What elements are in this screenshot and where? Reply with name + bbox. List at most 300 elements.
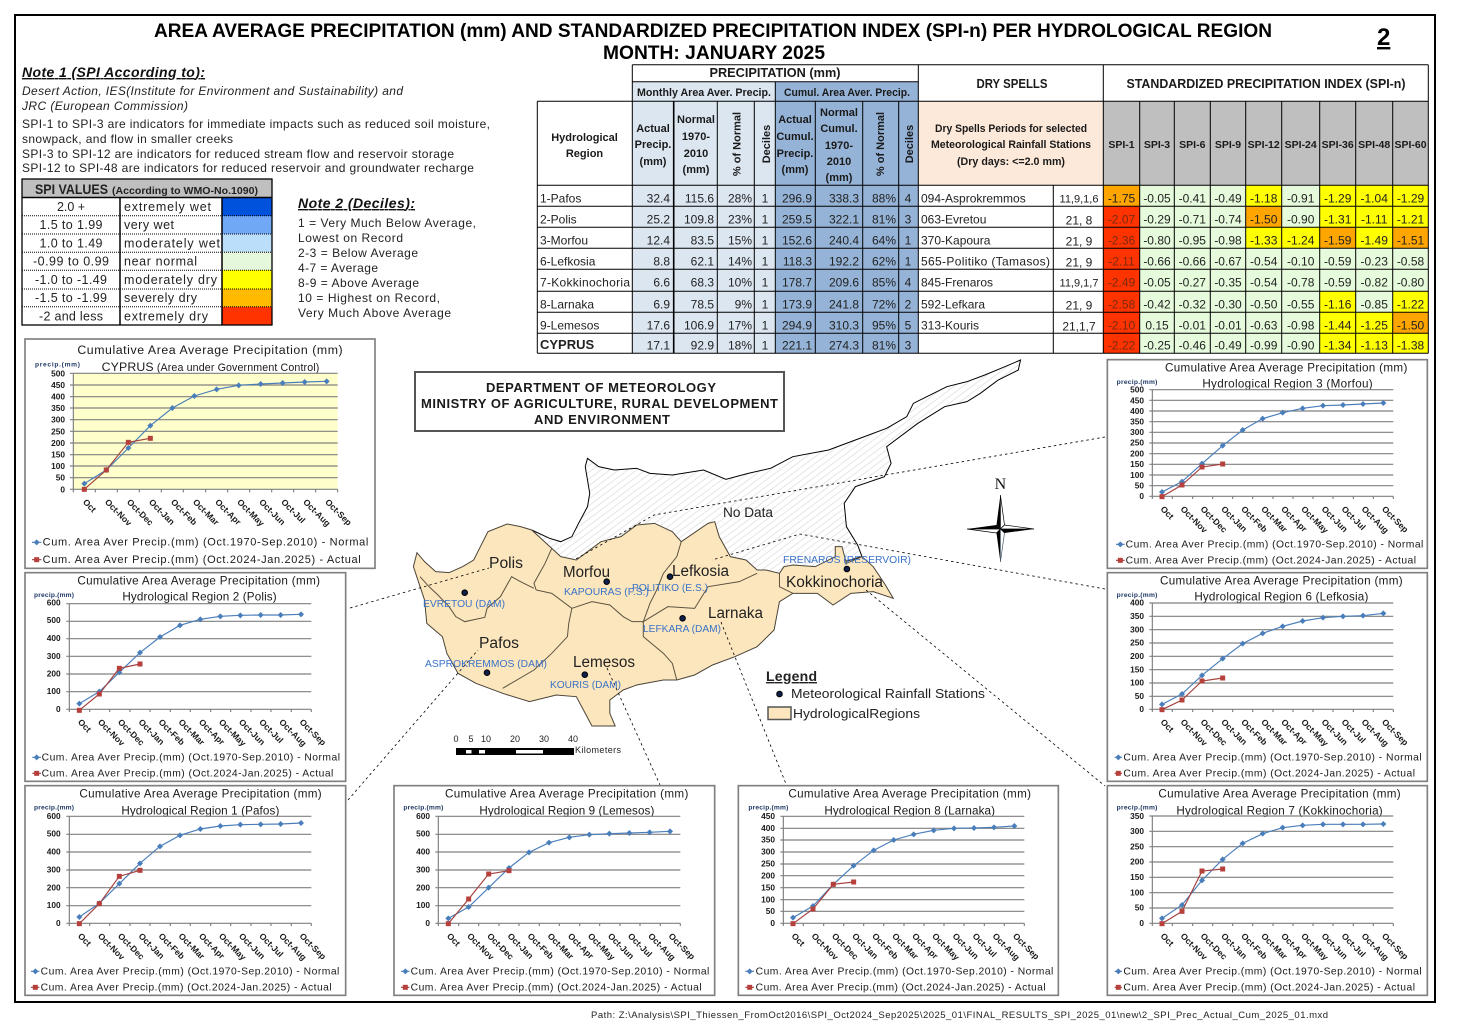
chart: Hydrological Region 6 (Lefkosia): 250 (1130, 638, 1144, 648)
row: 8-Larnaka: -1.22 (1397, 298, 1424, 312)
row: CYPRUS: 3 (905, 338, 912, 352)
row: 9-Lemesos: 9-Lemesos (540, 318, 599, 332)
region name labels: Kokkinochoria (786, 574, 883, 591)
chart: Hydrological Region 8 (Larnaka): Oct-Jan (850, 931, 880, 961)
chart: Hydrological Region 6 (Lefkosia): 350 (1130, 611, 1144, 621)
row: 8-Larnaka: -0.55 (1287, 298, 1315, 312)
row: 3-Morfou: 83.5 (691, 234, 714, 248)
note 2: deciles: 4-7 = Average (298, 261, 378, 275)
row: 6-Lefkosia: 62.1 (691, 254, 714, 268)
row: 8-Larnaka: 592-Lefkara (921, 298, 985, 312)
chart: Cyprus cumulative precipitation: 50 (56, 473, 65, 483)
chart: Hydrological Region 1 (Pafos): Oct-Feb (157, 931, 187, 961)
chart: Hydrological Region 6 (Lefkosia): Oct-Nov (1179, 717, 1210, 748)
row: 9-Lemesos: 17.6 (647, 318, 670, 332)
row: CYPRUS: 81% (872, 338, 896, 352)
chart: Hydrological Region 3 (Morfou): Oct-Mar (1259, 504, 1290, 535)
chart: Hydrological Region 9 (Lemesos): Oct-Jun (606, 931, 636, 961)
region name labels: Larnaka (708, 605, 763, 622)
row: 1-Pafos: -0.41 (1179, 192, 1206, 206)
row: 2-Polis: -1.50 (1250, 212, 1278, 226)
table headers: SPI-1 (1108, 139, 1135, 151)
chart: Hydrological Region 3 (Morfou): Oct-Jul (1340, 504, 1368, 532)
chart: Hydrological Region 2 (Polis): 0 (56, 704, 61, 714)
chart: Hydrological Region 6 (Lefkosia): Hydrological Region 6 (Lefkosia) (1194, 591, 1368, 604)
row: 6-Lefkosia: -0.10 (1287, 254, 1315, 268)
table headers: Normal (820, 107, 858, 119)
row: 6-Lefkosia: 1 (905, 254, 912, 268)
chart: Hydrological Region 8 (Larnaka): Cumulative Area Average Precipitation (mm) (788, 788, 1031, 801)
row: 3-Morfou: 152.6 (782, 234, 812, 248)
table headers: Monthly Area Aver. Precip. (637, 87, 771, 99)
chart: Hydrological Region 6 (Lefkosia): 100 (1130, 678, 1144, 688)
note 1: SPI explanation: SPI-12 to SPI-48 are indicators for reduced reservoir and groundwater recharge (22, 161, 474, 175)
chart: Hydrological Region 8 (Larnaka): 100 (761, 894, 775, 904)
chart: Cyprus cumulative precipitation: Oct-Jun (257, 497, 287, 527)
station labels: EVRETOU (DAM) (423, 598, 505, 610)
table headers: Hydrological (551, 132, 618, 144)
SPI values legend table: moderately wet (124, 236, 221, 250)
row: 9-Lemesos (540, 318, 1424, 334)
scale bar: 0 (453, 734, 459, 744)
chart: Hydrological Region 3 (Morfou): 100 (1130, 470, 1144, 480)
table headers: Cumul. (820, 123, 858, 135)
chart: Hydrological Region 1 (Pafos): Oct-Jul (257, 931, 285, 959)
rainfall stations (462, 566, 850, 678)
chart: Hydrological Region 6 (Lefkosia): 300 (1130, 624, 1144, 634)
chart: Hydrological Region 9 (Lemesos): Cumulative Area Average Precipitation (mm) (445, 788, 688, 801)
map legend (766, 668, 986, 721)
row: 1-Pafos: 32.4 (647, 192, 670, 206)
row: 1-Pafos: 88% (872, 192, 896, 206)
row: CYPRUS: -1.13 (1361, 338, 1388, 352)
row: 8-Larnaka: -0.30 (1214, 298, 1242, 312)
scale bar (453, 734, 622, 755)
table headers: SPI-3 (1144, 139, 1170, 151)
department box: AND ENVIRONMENT (534, 412, 670, 427)
row: 9-Lemesos: 5 (905, 318, 912, 332)
row: CYPRUS: -0.90 (1287, 338, 1315, 352)
row: 9-Lemesos: 95% (872, 318, 896, 332)
chart: Cyprus cumulative precipitation: Oct-Jan (147, 497, 177, 527)
chart: Cyprus cumulative precipitation: Oct-Dec (125, 497, 156, 528)
chart: Hydrological Region 3 (Morfou): 300 (1130, 427, 1144, 437)
chart: Hydrological Region 7 (Kokkinochoria): precip.(mm) (1117, 805, 1157, 812)
table headers: Actual (636, 123, 670, 135)
chart: Hydrological Region 9 (Lemesos) (394, 786, 715, 995)
row: 1-Pafos: -0.49 (1214, 192, 1242, 206)
row: 6-Lefkosia: 62% (872, 254, 896, 268)
chart: Hydrological Region 9 (Lemesos): Oct-Mar (546, 931, 576, 962)
row: 7-Kokkinochoria: -0.05 (1143, 276, 1171, 290)
row: 6-Lefkosia: -0.23 (1361, 254, 1388, 268)
row: 9-Lemesos: 17% (728, 318, 752, 332)
row: 9-Lemesos: -1.44 (1324, 318, 1352, 332)
table headers: STANDARDIZED PRECIPITATION INDEX (SPI-n) (1126, 76, 1406, 91)
chart: Hydrological Region 2 (Polis): Oct-May (217, 717, 248, 748)
region boundaries (420, 542, 793, 688)
chart: Hydrological Region 8 (Larnaka): Oct (790, 931, 807, 948)
table headers: 1970- (682, 131, 710, 143)
chart: Hydrological Region 2 (Polis): Oct-Feb (157, 717, 187, 747)
table headers: Dry Spells Periods for selected (935, 123, 1087, 135)
chart: Hydrological Region 7 (Kokkinochoria): 50 (1135, 903, 1144, 913)
row: 8-Larnaka: 2 (905, 298, 912, 312)
row: 9-Lemesos: -0.01 (1179, 318, 1206, 332)
chart: Hydrological Region 8 (Larnaka): Oct-Apr (910, 931, 941, 961)
row: 9-Lemesos: -1.50 (1397, 318, 1424, 332)
chart: Hydrological Region 8 (Larnaka): 50 (766, 906, 775, 916)
chart: Hydrological Region 6 (Lefkosia): Cum. Area Aver Precip.(mm) (Oct.1970-Sep.2010) - Normal (1123, 753, 1422, 764)
chart: Hydrological Region 1 (Pafos): precip.(mm) (34, 805, 74, 812)
SPI values legend table: extremely dry (124, 310, 209, 324)
table headers: SPI-9 (1215, 139, 1241, 151)
chart: Hydrological Region 8 (Larnaka): Cum. Area Aver Precip.(mm) (Oct.1970-Sep.2010) - Normal (756, 967, 1053, 978)
row: CYPRUS: 221.1 (782, 338, 812, 352)
table headers: Precip. (635, 139, 671, 151)
row: 3-Morfou: 21, 9 (1066, 234, 1093, 248)
chart: Hydrological Region 8 (Larnaka): Oct-Jun (951, 931, 981, 961)
chart: Hydrological Region 9 (Lemesos): Cum. Area Aver Precip.(mm) (Oct.2024-Jan.2025) - Actual (411, 983, 702, 994)
row: 6-Lefkosia: -0.66 (1143, 254, 1171, 268)
chart: Hydrological Region 6 (Lefkosia): Cum. Area Aver Precip.(mm) (Oct.2024-Jan.2025) - Actual (1123, 769, 1415, 780)
row: 7-Kokkinochoria: 1 (762, 276, 769, 290)
chart: Hydrological Region 1 (Pafos): Cumulative Area Average Precipitation (mm) (79, 788, 322, 801)
row: 2-Polis (540, 212, 1424, 228)
department box (415, 372, 784, 431)
chart: Hydrological Region 1 (Pafos): 200 (47, 882, 61, 892)
station labels: POLITIKO (E.S.) (632, 582, 708, 594)
row: 9-Lemesos: 310.3 (829, 318, 859, 332)
chart: Hydrological Region 6 (Lefkosia): Oct-Jun (1320, 717, 1350, 747)
scale bar: 20 (510, 734, 520, 744)
chart: Hydrological Region 2 (Polis): 300 (47, 651, 61, 661)
row: CYPRUS: -1.34 (1324, 338, 1352, 352)
row: 8-Larnaka: -1.16 (1324, 298, 1352, 312)
row: CYPRUS: -0.25 (1143, 338, 1171, 352)
note 2: deciles (298, 195, 476, 320)
row: CYPRUS: 18% (728, 338, 752, 352)
chart: Cyprus cumulative precipitation: 500 (51, 368, 65, 378)
chart: Cyprus cumulative precipitation: Oct-Feb (169, 497, 199, 527)
row: 1-Pafos: 4 (905, 192, 912, 206)
chart: Hydrological Region 7 (Kokkinochoria): Oct-Jul (1340, 931, 1368, 959)
SPI values legend table: moderately dry (124, 273, 218, 287)
row: 3-Morfou: 12.4 (647, 234, 670, 248)
row: 2-Polis: -0.74 (1214, 212, 1242, 226)
row: 1-Pafos: 11,9,1,6 (1060, 194, 1098, 206)
row: 1-Pafos: -1.29 (1324, 192, 1352, 206)
row: 3-Morfou: 1 (762, 234, 769, 248)
note 1: SPI explanation: SPI-1 to SPI-3 are indicators for immediate impacts such as reduced soil moisture, (22, 117, 490, 131)
row: 7-Kokkinochoria: 6.6 (653, 276, 670, 290)
chart: Hydrological Region 3 (Morfou): Oct-Sep (1380, 504, 1410, 535)
row: 8-Larnaka: 1 (762, 298, 769, 312)
chart: Hydrological Region 3 (Morfou): Cum. Area Aver Precip.(mm) (Oct.2024-Jan.2025) - Actual (1126, 556, 1416, 567)
station labels: LEFKARA (DAM) (643, 623, 721, 635)
chart: Hydrological Region 3 (Morfou): 350 (1130, 416, 1144, 426)
table headers: Cumul. Area Aver. Precip. (784, 87, 910, 99)
row: 6-Lefkosia: 1 (762, 254, 769, 268)
chart: Hydrological Region 7 (Kokkinochoria): 300 (1130, 826, 1144, 836)
table headers: (mm) (683, 164, 710, 176)
chart: Hydrological Region 2 (Polis): Cumulative Area Average Precipitation (mm) (77, 575, 320, 588)
scale bar: 10 (481, 734, 491, 744)
chart: Hydrological Region 1 (Pafos): 300 (47, 864, 61, 874)
table headers: DRY SPELLS (976, 76, 1048, 91)
map of Cyprus: hydrological regions (413, 360, 1021, 726)
chart: Hydrological Region 6 (Lefkosia): Oct-Jan (1219, 717, 1249, 747)
chart: Hydrological Region 7 (Kokkinochoria): 100 (1130, 887, 1144, 897)
chart: Hydrological Region 7 (Kokkinochoria): Oct-Aug (1360, 931, 1391, 962)
chart: Hydrological Region 6 (Lefkosia): Oct-Apr (1279, 717, 1310, 747)
icon: north arrow (967, 476, 1034, 562)
SPI values legend table: 1.0 to 1.49 (40, 236, 103, 250)
row: 9-Lemesos: 1 (762, 318, 769, 332)
row: 7-Kokkinochoria: -0.78 (1287, 276, 1315, 290)
chart: Hydrological Region 2 (Polis) (25, 573, 346, 781)
south hydrological regions fill (413, 522, 893, 726)
chart: Hydrological Region 2 (Polis): Oct-Sep (298, 717, 328, 748)
chart: Hydrological Region 8 (Larnaka): 350 (761, 835, 775, 845)
row: 1-Pafos (540, 192, 1424, 206)
chart: Hydrological Region 3 (Morfou): Oct-Nov (1179, 504, 1210, 535)
chart: Hydrological Region 8 (Larnaka): Cum. Area Aver Precip.(mm) (Oct.2024-Jan.2025) - Actual (756, 983, 1046, 994)
note 1: SPI explanation (21, 64, 490, 175)
row: 2-Polis: 81% (872, 212, 896, 226)
table headers: Meteorological Rainfall Stations (931, 139, 1091, 151)
chart: Cyprus cumulative precipitation: 150 (51, 450, 65, 460)
row: 2-Polis: 23% (728, 212, 752, 226)
north no-data hatched area (532, 360, 1021, 587)
chart: Hydrological Region 2 (Polis): Oct-Jan (137, 717, 166, 747)
note 2: deciles: Very Much Above Average (298, 306, 451, 320)
region name labels: Lemesos (573, 654, 635, 671)
chart: Hydrological Region 9 (Lemesos): 600 (416, 811, 430, 821)
row: 2-Polis: -2.07 (1108, 212, 1135, 226)
row: CYPRUS: 1 (762, 338, 769, 352)
table headers: SPI-6 (1179, 139, 1206, 151)
region name labels (479, 504, 883, 671)
chart: Hydrological Region 8 (Larnaka): 150 (761, 882, 775, 892)
chart: Hydrological Region 2 (Polis): 100 (47, 686, 61, 696)
chart: Hydrological Region 8 (Larnaka): Oct-Feb (870, 931, 900, 961)
chart: Hydrological Region 6 (Lefkosia): precip.(mm) (1117, 592, 1157, 599)
row: 3-Morfou: 1 (905, 234, 912, 248)
table headers: (mm) (782, 164, 809, 176)
chart: Hydrological Region 3 (Morfou): 50 (1135, 480, 1144, 490)
table headers: Normal (677, 114, 715, 126)
chart: Cyprus cumulative precipitation: Cumulative Area Average Precipitation (mm) (77, 343, 343, 357)
row: 3-Morfou: 240.4 (829, 234, 859, 248)
chart: Hydrological Region 6 (Lefkosia): 400 (1130, 598, 1144, 608)
region name labels: No Data (723, 504, 773, 520)
row: 7-Kokkinochoria: 178.7 (782, 276, 812, 290)
map legend: HydrologicalRegions (793, 706, 921, 721)
chart: Hydrological Region 9 (Lemesos): Cum. Area Aver Precip.(mm) (Oct.1970-Sep.2010) - Normal (411, 967, 709, 978)
row: 9-Lemesos: -0.98 (1287, 318, 1315, 332)
chart: Hydrological Region 6 (Lefkosia): Oct-May (1299, 717, 1331, 748)
SPI values legend table: 1.5 to 1.99 (40, 218, 103, 232)
row: 1-Pafos: 338.3 (829, 192, 859, 206)
row: 7-Kokkinochoria: 10% (728, 276, 752, 290)
region name labels: Morfou (563, 564, 610, 581)
row: 3-Morfou (540, 234, 1424, 248)
row: 1-Pafos: -0.91 (1287, 192, 1315, 206)
map legend: Legend (766, 668, 817, 684)
row: 2-Polis: -0.29 (1143, 212, 1171, 226)
chart: Cyprus cumulative precipitation (25, 339, 375, 568)
row: 6-Lefkosia: 565-Politiko (Tamasos) (921, 254, 1050, 268)
chart: Cyprus cumulative precipitation: 0 (60, 484, 65, 494)
station labels: KOURIS (DAM) (550, 679, 621, 691)
chart: Hydrological Region 8 (Larnaka): 250 (761, 859, 775, 869)
row: 3-Morfou: -1.33 (1250, 234, 1278, 248)
row: 8-Larnaka: -0.42 (1143, 298, 1171, 312)
row: 3-Morfou: 370-Kapoura (921, 234, 991, 248)
chart: Hydrological Region 9 (Lemesos): Oct-Nov (465, 931, 496, 962)
table headers: % of Normal (732, 112, 744, 176)
row: 6-Lefkosia: 192.2 (829, 254, 859, 268)
chart: Hydrological Region 8 (Larnaka): 450 (761, 811, 775, 821)
chart: Hydrological Region 9 (Lemesos): Oct-Jan (506, 931, 535, 961)
row: 9-Lemesos: 294.9 (782, 318, 812, 332)
table headers: Deciles (761, 125, 773, 163)
chart: Hydrological Region 1 (Pafos): Oct-Aug (277, 931, 308, 962)
map legend: Meteorological Rainfall Stations (791, 686, 986, 701)
row: 2-Polis: 063-Evretou (921, 212, 986, 226)
row: 2-Polis: -1.11 (1361, 212, 1388, 226)
chart: Hydrological Region 3 (Morfou): 450 (1130, 395, 1144, 405)
chart: Hydrological Region 3 (Morfou): Cum. Area Aver Precip.(mm) (Oct.1970-Sep.2010) - Normal (1126, 540, 1423, 551)
chart: Hydrological Region 7 (Kokkinochoria): 150 (1130, 872, 1144, 882)
chart: Cyprus cumulative precipitation: Cum. Area Aver Precip.(mm) (Oct.2024-Jan.2025) - Actual (43, 554, 361, 566)
station labels: FRENAROS (RESERVOIR) (783, 554, 911, 566)
chart: Hydrological Region 1 (Pafos): Cum. Area Aver Precip.(mm) (Oct.2024-Jan.2025) - Actual (41, 983, 332, 994)
row: 8-Larnaka: 78.5 (691, 298, 714, 312)
chart: Hydrological Region 3 (Morfou): Oct-Dec (1199, 504, 1229, 535)
chart: Hydrological Region 9 (Lemesos): Oct-Sep (667, 931, 697, 962)
chart: Hydrological Region 1 (Pafos): 0 (56, 918, 61, 928)
chart: Hydrological Region 9 (Lemesos): Oct-Feb (526, 931, 556, 961)
row: 7-Kokkinochoria: -0.80 (1397, 276, 1424, 290)
row: CYPRUS: -2.22 (1108, 338, 1135, 352)
row: 9-Lemesos: -1.25 (1361, 318, 1388, 332)
station labels: ASPROKREMMOS (DAM) (425, 658, 547, 670)
row: CYPRUS: -0.46 (1179, 338, 1206, 352)
chart: Hydrological Region 2 (Polis): Oct-Jun (237, 717, 267, 747)
chart: Hydrological Region 6 (Lefkosia): Oct-Dec (1199, 717, 1229, 748)
table headers: 2010 (684, 148, 708, 160)
chart: Hydrological Region 3 (Morfou): Oct-Jan (1219, 504, 1249, 534)
chart: Hydrological Region 6 (Lefkosia): Oct-Sep (1380, 717, 1410, 748)
chart: Hydrological Region 8 (Larnaka): Oct-Jul (971, 931, 999, 959)
SPI values legend table: -0.99 to 0.99 (33, 254, 109, 268)
chart: Hydrological Region 3 (Morfou): 200 (1130, 448, 1144, 458)
chart: Hydrological Region 8 (Larnaka): 200 (761, 870, 775, 880)
chart: Hydrological Region 7 (Kokkinochoria): Cum. Area Aver Precip.(mm) (Oct.2024-Jan.2025) - Actual (1123, 983, 1415, 994)
table headers: (mm) (826, 172, 853, 184)
chart: Hydrological Region 6 (Lefkosia): 50 (1135, 691, 1144, 701)
row: 7-Kokkinochoria: 7-Kokkinochoria (540, 276, 630, 290)
chart: Hydrological Region 8 (Larnaka): 0 (770, 918, 775, 928)
scale bar: 40 (568, 734, 578, 744)
row: 2-Polis: -1.21 (1397, 212, 1424, 226)
chart: Hydrological Region 7 (Kokkinochoria): Oct-Apr (1279, 931, 1310, 961)
row: 7-Kokkinochoria: 68.3 (691, 276, 714, 290)
table headers: SPI-48 (1358, 139, 1390, 151)
row: 8-Larnaka (540, 298, 1424, 312)
row: 7-Kokkinochoria: 845-Frenaros (921, 276, 993, 290)
chart: Hydrological Region 2 (Polis): Oct-Mar (177, 717, 207, 748)
chart: Hydrological Region 3 (Morfou): 500 (1130, 384, 1144, 394)
chart: Cyprus cumulative precipitation: Oct-Aug (301, 497, 332, 528)
table headers: SPI-24 (1285, 139, 1317, 151)
row: 3-Morfou: 3-Morfou (540, 234, 588, 248)
row: 9-Lemesos: -0.63 (1250, 318, 1278, 332)
chart: Hydrological Region 7 (Kokkinochoria): 250 (1130, 841, 1144, 851)
table headers: PRECIPITATION (mm) (710, 65, 840, 80)
chart: Hydrological Region 7 (Kokkinochoria): Oct-Dec (1199, 931, 1229, 962)
chart: Hydrological Region 3 (Morfou) (1107, 360, 1427, 568)
chart: Hydrological Region 8 (Larnaka): Oct-Aug (991, 931, 1022, 962)
station labels: KAPOURAS (F.S.) (564, 586, 649, 598)
chart: Cyprus cumulative precipitation: 100 (51, 461, 65, 471)
chart: Hydrological Region 1 (Pafos): 600 (47, 811, 61, 821)
note 1: SPI explanation: Desert Action, IES(Institute for Environment and Sustainability) and (22, 84, 403, 98)
row: 1-Pafos: -0.05 (1143, 192, 1171, 206)
row: 6-Lefkosia: 8.8 (653, 254, 670, 268)
row: 3-Morfou: -1.24 (1287, 234, 1315, 248)
row: 9-Lemesos: 0.15 (1145, 318, 1169, 332)
chart: Hydrological Region 8 (Larnaka): precip.(mm) (748, 805, 788, 812)
station labels (423, 554, 911, 691)
chart: Hydrological Region 1 (Pafos): Oct (76, 931, 93, 948)
row: 3-Morfou: -2.36 (1108, 234, 1135, 248)
row: 6-Lefkosia: -0.58 (1397, 254, 1424, 268)
chart: Hydrological Region 6 (Lefkosia) (1107, 573, 1427, 781)
chart: Hydrological Region 9 (Lemesos): Oct-Aug (646, 931, 677, 962)
chart: Hydrological Region 2 (Polis): Oct-Apr (197, 717, 227, 747)
chart: Hydrological Region 7 (Kokkinochoria): 0 (1139, 918, 1144, 928)
row: 8-Larnaka: -0.50 (1250, 298, 1278, 312)
table headers: (mm) (640, 156, 667, 168)
SPI values legend table: SPI VALUES (35, 181, 108, 197)
chart: Hydrological Region 6 (Lefkosia): Cumulative Area Average Precipitation (mm) (1160, 575, 1403, 588)
table headers: Actual (778, 114, 812, 126)
chart: Cyprus cumulative precipitation: 350 (51, 403, 65, 413)
chart: Hydrological Region 8 (Larnaka): Oct-Nov (810, 931, 841, 962)
row: 8-Larnaka: 6.9 (653, 298, 670, 312)
chart: Hydrological Region 8 (Larnaka): 400 (761, 823, 775, 833)
chart: Hydrological Region 9 (Lemesos): 0 (425, 918, 430, 928)
SPI values legend table: -2 and less (39, 310, 103, 324)
row: 6-Lefkosia (540, 254, 1424, 270)
row: 7-Kokkinochoria: 11,9,1,7 (1060, 278, 1098, 290)
table headers: Precip. (777, 148, 813, 160)
note 2: deciles: 2-3 = Below Average (298, 246, 418, 260)
chart: Hydrological Region 7 (Kokkinochoria): Cum. Area Aver Precip.(mm) (Oct.1970-Sep.2010) - Normal (1123, 967, 1422, 978)
row: 7-Kokkinochoria: 85% (872, 276, 896, 290)
chart: Hydrological Region 7 (Kokkinochoria): Oct (1159, 931, 1176, 948)
row: 2-Polis: -0.71 (1179, 212, 1206, 226)
chart: Hydrological Region 2 (Polis): Oct-Nov (96, 717, 127, 748)
row: 1-Pafos: 1 (762, 192, 769, 206)
chart: Hydrological Region 9 (Lemesos): Oct-Jul (626, 931, 654, 959)
chart: Cyprus cumulative precipitation: Oct-Sep (323, 497, 354, 528)
chart: Cyprus cumulative precipitation: 200 (51, 438, 65, 448)
chart: Cyprus cumulative precipitation: 250 (51, 426, 65, 436)
